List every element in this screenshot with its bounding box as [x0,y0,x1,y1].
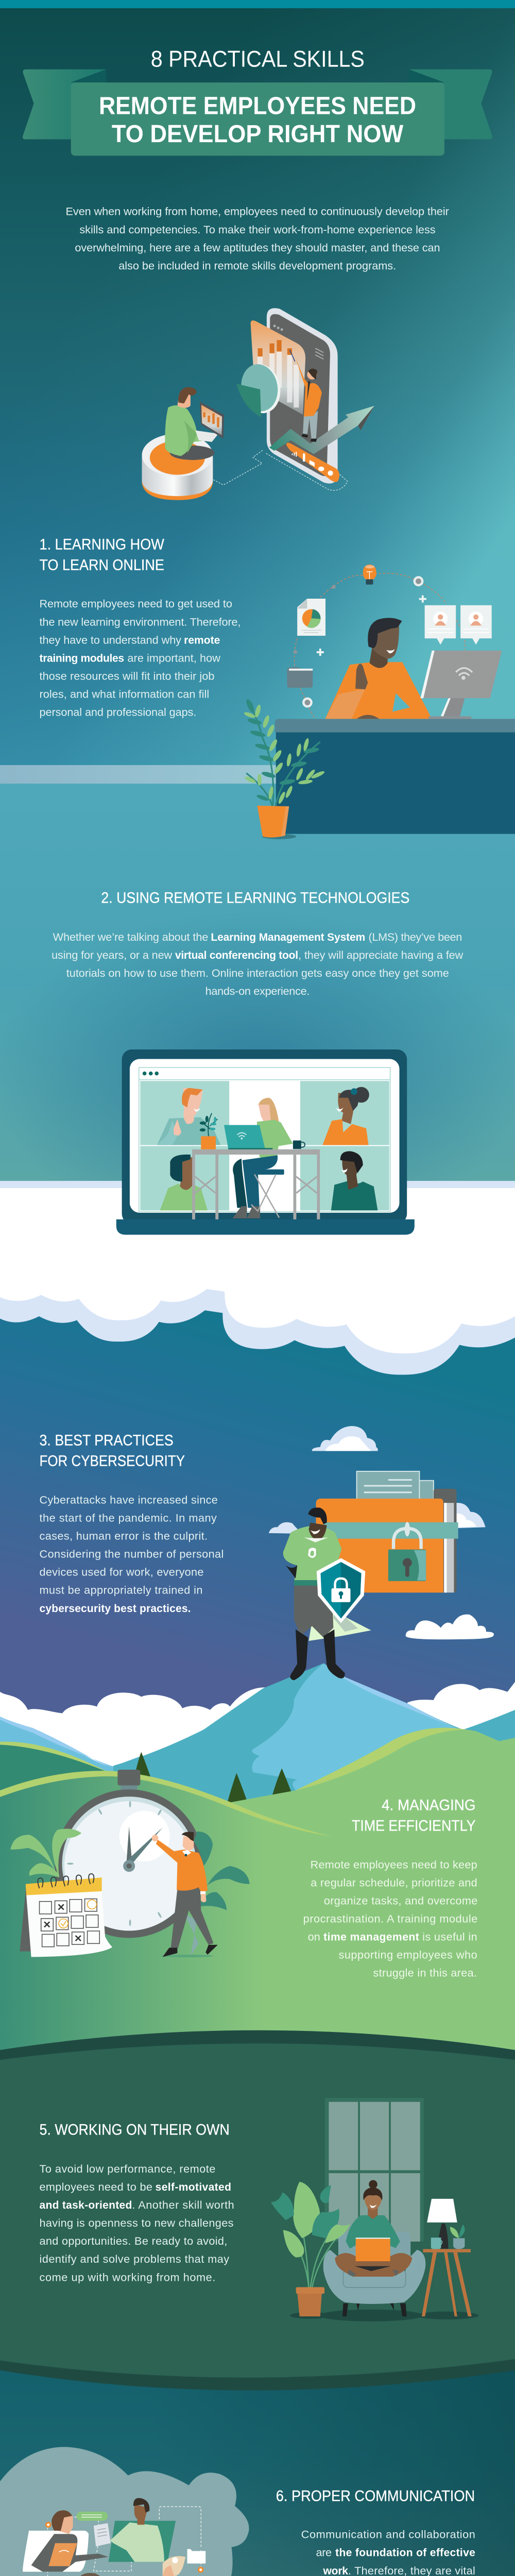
background: intro gradient [0,0,515,765]
background: section 6-8 gradient [0,2318,515,2576]
body 4: struggle in this area. [373,1967,477,1979]
landscape: clouds and mountains [0,1663,515,1808]
illustration: man at desk with monitor [325,618,502,719]
body 4: a regular schedule, prioritize and [311,1876,477,1889]
body 3: Cyberattacks have increased since [40,1493,218,1506]
heading 2: 2. USING REMOTE LEARNING TECHNOLOGIES [101,890,409,907]
panel: section 2 cloud and laptop [0,1049,515,1615]
body 2: (LMS) they’ve been [369,930,462,943]
icons: floating learning network [287,565,492,721]
body 2: tutorials on how to use them. Online interaction gets easy once they get some [66,967,449,979]
body 2: using for years, or a new [52,948,173,961]
body 1: those resources will fit into their job [40,670,214,683]
illustration: man moving clock hand [152,1832,218,1957]
panel: section 1 learning online [40,536,515,997]
background: dark arc band [0,2030,515,2391]
body 6: the foundation of effective [335,2547,475,2559]
body 5: . Another skill worth [132,2198,234,2211]
body 4: on [308,1930,320,1943]
body 5: To avoid low performance, remote [40,2162,215,2175]
body 1: personal and professional gaps. [40,706,196,719]
heading 4: TIME EFFICIENTLY [352,1818,475,1835]
illustration: laptop video conference [116,1049,415,1235]
body 4: Remote employees need to keep [311,1858,477,1871]
body 2: virtual conferencing tool [175,950,298,961]
intro paragraph: also be included in remote skills development programs. [118,259,396,272]
background: floor band [0,765,515,784]
illustration: woman in armchair with laptop [319,2180,425,2321]
body 3: must be appropriately trained in [40,1584,202,1597]
body 5: self-motivated [156,2181,231,2193]
title ribbon: TO DEVELOP RIGHT NOW [112,120,403,148]
body 4: is useful in [422,1930,477,1943]
panel: section 5 working on their own [0,2098,478,2576]
title ribbon [23,70,492,156]
heading 1 [40,536,165,574]
illustration: cloud with communicating team [0,2447,249,2576]
illustration: calendar [20,1874,112,1957]
body 3: Considering the number of personal [40,1548,224,1561]
title ribbon: REMOTE EMPLOYEES NEED [99,92,416,120]
background: floor [0,784,515,1181]
body 5: employees need to be [40,2180,152,2193]
heading 5: 5. WORKING ON THEIR OWN [40,2121,230,2138]
heading 1: TO LEARN ONLINE [40,557,164,574]
icon: cloud [406,1615,494,1639]
trees [0,1747,305,1830]
body 4: procrastination. A training module [303,1912,477,1925]
body 5: and task-oriented [40,2199,132,2211]
body 1: the new learning environment. Therefore, [40,615,241,628]
body 6 [301,2528,475,2576]
heading 1: 1. LEARNING HOW [40,536,165,553]
background: dark green panel [0,2043,515,2378]
body 1: Remote employees need to get used to [40,597,232,610]
illustration: smartphone with chart and presenter [236,308,374,483]
body 3: the start of the pandemic. In many [40,1511,217,1524]
heading 3: 3. BEST PRACTICES [40,1432,174,1449]
panel: section 5 dark arc [0,2030,515,2391]
body 2: , they will appreciate having a few [298,948,464,961]
cloud shadow [0,1181,515,1375]
heading 3 [40,1432,185,1470]
cloud [0,1188,515,1353]
illustration: superhero with shield in front of books [283,1471,458,1680]
illustration: side table with lamp [416,2199,478,2319]
heading 4 [352,1797,475,1835]
panel: intro [23,46,492,500]
body 2: Learning Management System [211,931,365,943]
desk [275,719,515,834]
heading 3: FOR CYBERSECURITY [40,1453,185,1470]
title kicker: 8 PRACTICAL SKILLS [151,46,365,72]
body 6: Communication and collaboration [301,2528,475,2541]
body 1: remote [184,634,220,646]
intro paragraph: skills and competencies. To make their work-from-home experience less [79,223,436,236]
body 4: organize tasks, and overcome [324,1894,477,1907]
body 2: hands-on experience. [205,985,310,997]
intro paragraph: overwhelming, here are a few aptitudes they should master, and these can [75,241,440,254]
body 1 [40,597,241,719]
intro paragraph: Even when working from home, employees need to continuously develop their [66,205,449,218]
body 4 [303,1858,477,1979]
body 2 [52,930,464,997]
background: section 3 sky [0,1262,515,1752]
illustration: big potted plant [271,2182,350,2319]
landscape: green hills [0,1728,515,2061]
body 5: identify and solve problems that may [40,2252,229,2265]
body 1: they have to understand why [40,633,181,646]
body 4: time management [323,1931,419,1943]
heading 4: 4. MANAGING [382,1797,475,1814]
body 2: Whether we’re talking about the [53,930,208,943]
icon: potted plant [244,698,325,839]
body 3: cases, human error is the culprit. [40,1530,208,1543]
illustration: person with laptop on cylinder connected to phone [142,387,348,500]
illustration: window [325,2098,424,2242]
body 5: having is openness to new challenges [40,2216,234,2229]
body 3 [40,1493,224,1615]
body 4: supporting employees who [339,1948,477,1961]
body 5 [40,2162,234,2283]
intro paragraph [66,205,449,272]
body 6: are [316,2546,332,2559]
icon: clouds around books [269,1426,486,1534]
body 1: roles, and what information can fill [40,688,209,701]
body 3: cybersecurity best practices. [40,1603,191,1615]
illustration: stopwatch [55,1770,203,1938]
panel: section 3 hero with books [0,1471,515,2061]
body 1: training modules [40,652,124,664]
heading 6: 6. PROPER COMMUNICATION [276,2488,475,2505]
icon: leaves [10,1829,250,1910]
body 3: devices used for work, everyone [40,1566,203,1579]
body 1: are important, how [127,651,220,664]
body 5: come up with working from home. [40,2270,215,2283]
body 5: and opportunities. Be ready to avoid, [40,2234,227,2247]
